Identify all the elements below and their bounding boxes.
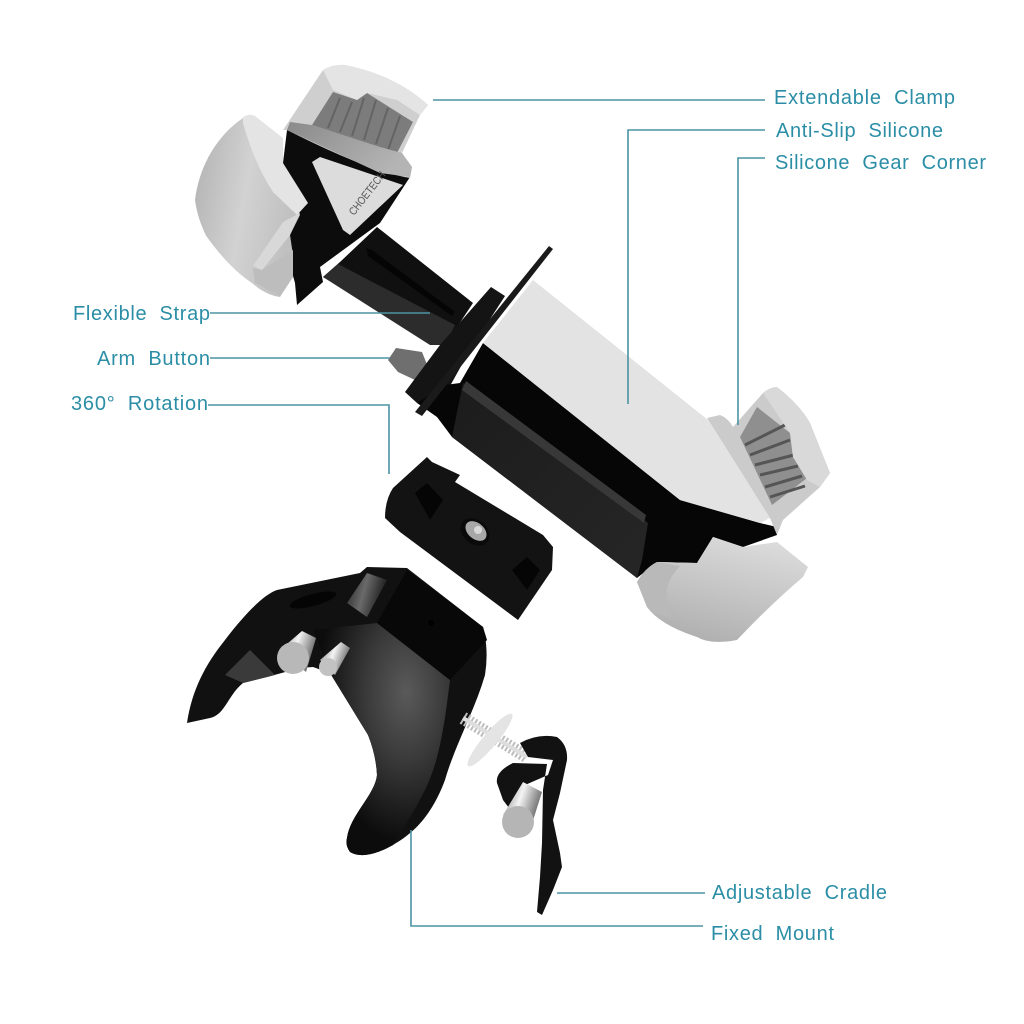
brand text: CHOETECH [347, 169, 388, 218]
hinge [347, 573, 387, 617]
small pin [320, 642, 350, 675]
lever pin [503, 782, 542, 830]
leader: extendable clamp [433, 99, 765, 101]
leader: anti-slip silicone [628, 130, 765, 404]
leader lines [208, 100, 765, 926]
bolt [462, 517, 490, 545]
label: Fixed Mount: Fixed Mount [711, 923, 834, 945]
label: Extendable Clamp: Extendable Clamp [774, 87, 955, 109]
cross plate [415, 246, 553, 416]
mounting plate [385, 457, 553, 620]
clamp back body [283, 130, 410, 305]
pins [277, 631, 350, 676]
leader: adjustable cradle [557, 892, 705, 894]
label: Silicone Gear Corner: Silicone Gear Corner [775, 152, 986, 174]
bottom clamp [637, 537, 808, 642]
label: Arm Button: Arm Button [97, 348, 210, 370]
leader: flexible strap [210, 312, 430, 314]
leader: arm button [210, 357, 390, 359]
top extendable clamp [283, 65, 428, 178]
arm with flexible strap [323, 227, 473, 345]
right gear corner clamp [707, 387, 830, 535]
label: Anti-Slip Silicone: Anti-Slip Silicone [776, 120, 943, 142]
left clamp [195, 115, 308, 297]
leader: fixed mount [411, 830, 703, 926]
fixed mount clamp [187, 567, 487, 855]
leader: silicone gear corner [738, 158, 765, 425]
adjustable cradle lever [497, 736, 567, 915]
cross plate block [405, 287, 505, 403]
label: Flexible Strap: Flexible Strap [73, 303, 210, 325]
main body [417, 343, 777, 578]
label: 360° Rotation: 360° Rotation [71, 393, 208, 415]
brand triangle [312, 157, 403, 235]
anti-slip silicone pad [483, 280, 770, 523]
arm button [388, 348, 430, 380]
large pin [280, 631, 316, 672]
leader: 360 rotation [208, 405, 389, 474]
washer [463, 709, 517, 771]
spring and bolt [463, 709, 527, 771]
phone holder assembly [195, 65, 830, 642]
label: Adjustable Cradle: Adjustable Cradle [712, 882, 887, 904]
